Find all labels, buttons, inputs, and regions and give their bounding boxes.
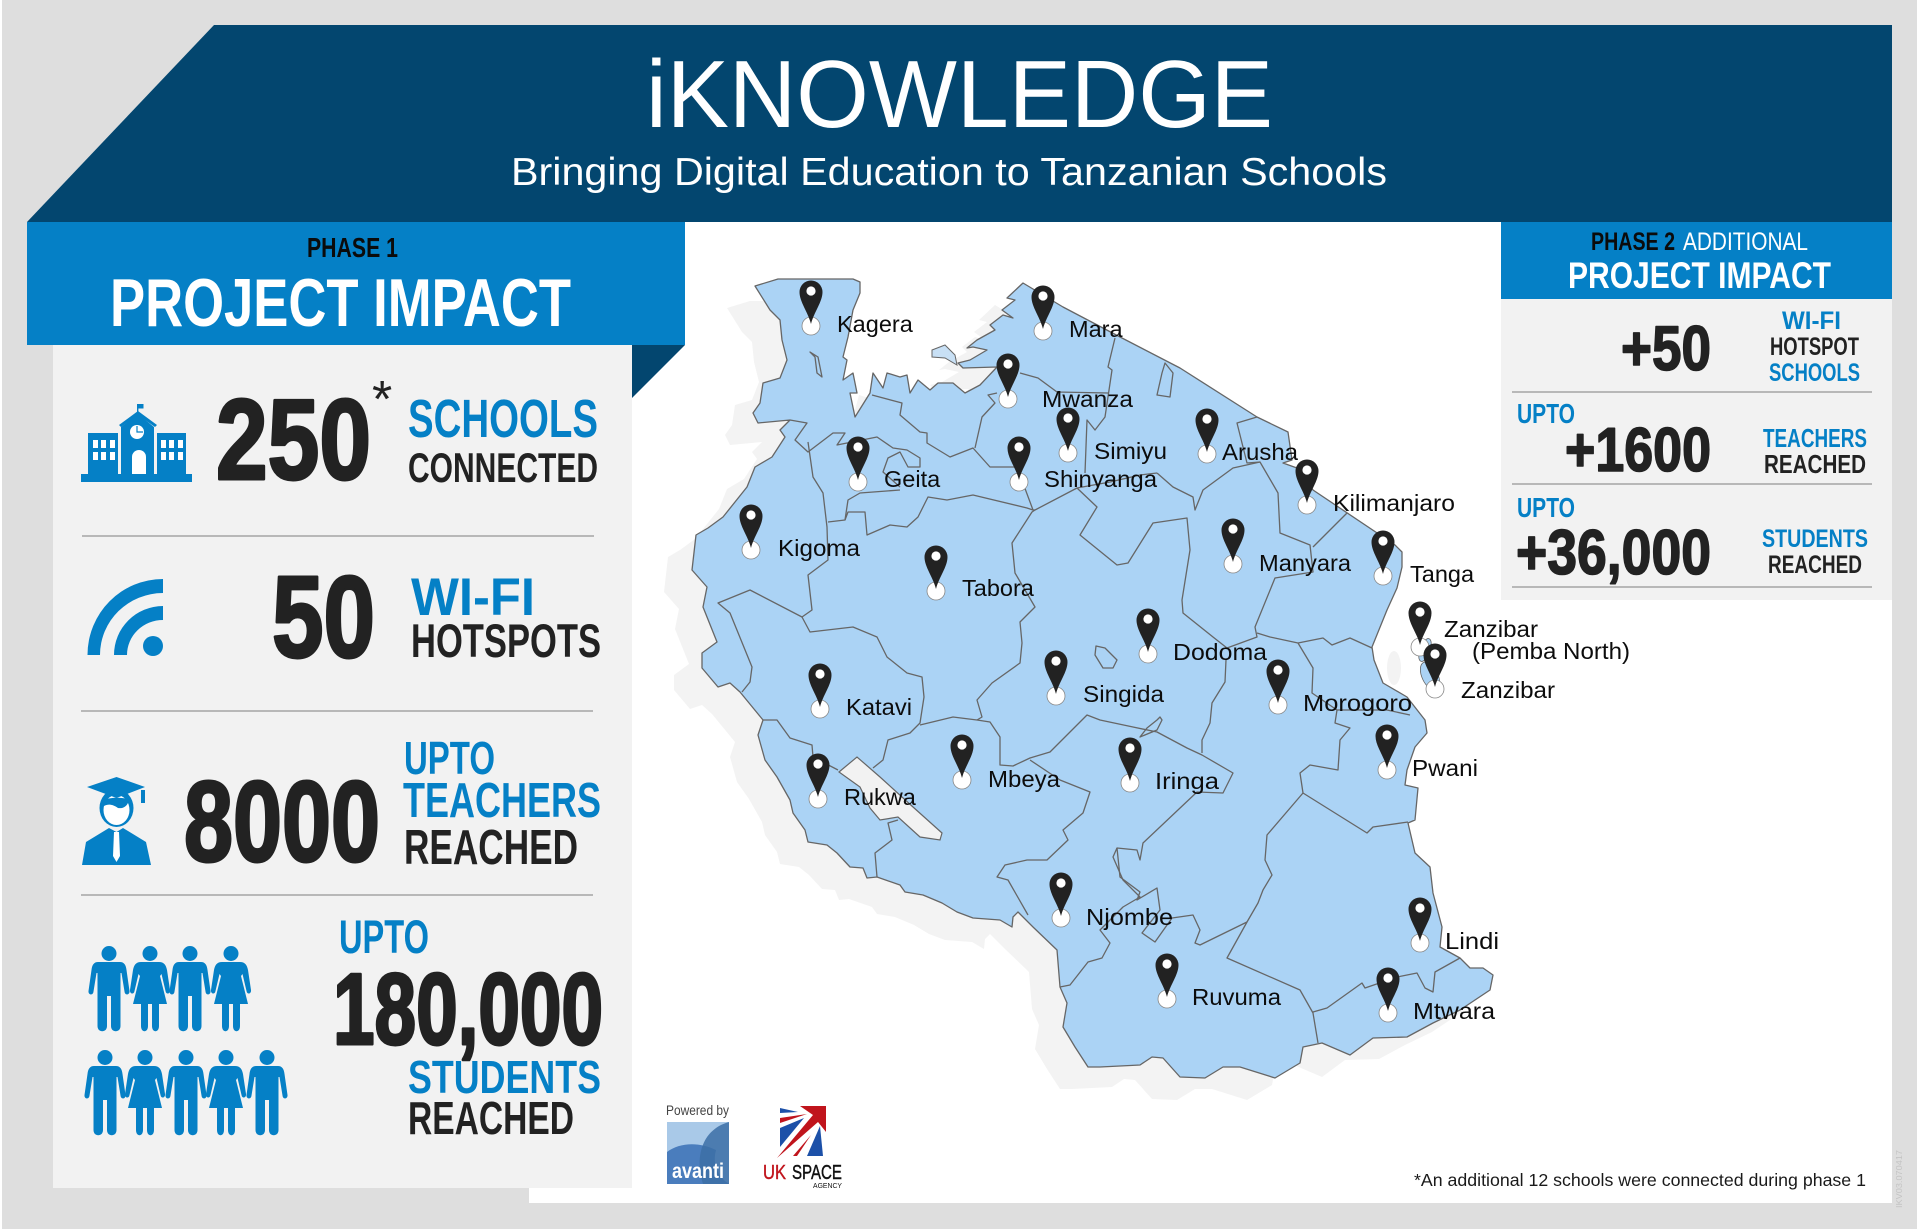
panel background	[53, 345, 632, 1188]
stat: +36,000 students: REACHED	[1768, 551, 1862, 579]
stat: 180,000 students: 180,000	[333, 954, 603, 1066]
stat: +36,000 students: UPTO	[1517, 492, 1575, 523]
region labels: Zanzibar	[1461, 677, 1555, 703]
region labels: Tabora	[962, 575, 1035, 601]
white content area	[529, 222, 1892, 1203]
regions	[692, 279, 1493, 1078]
phase 2 header band	[1501, 222, 1892, 299]
region labels: Kigoma	[778, 535, 861, 561]
region labels: Morogoro	[1303, 690, 1412, 716]
stat: +1600 teachers: UPTO	[1517, 398, 1575, 429]
region labels: Dodoma	[1173, 639, 1268, 665]
phase 2 label: PHASE 2	[1591, 228, 1675, 256]
region labels: Lindi	[1445, 928, 1499, 954]
stat: +50 hotspot schools: HOTSPOT	[1770, 333, 1859, 361]
phase 2 label	[1591, 228, 1808, 256]
subtitle: Bringing Digital Education to Tanzanian Schools	[511, 151, 1387, 194]
stat: 250 schools	[216, 371, 598, 504]
stat: 8000 teachers: REACHED	[404, 821, 578, 875]
header banner	[27, 25, 1892, 222]
region labels: Njombe	[1086, 904, 1173, 930]
stat: 8000 teachers: 8000	[184, 759, 380, 886]
Ukerewe island	[932, 345, 957, 365]
region labels: Pwani	[1412, 755, 1478, 781]
phase 2 label: ADDITIONAL	[1683, 228, 1808, 256]
region labels: Mwanza	[1042, 386, 1134, 412]
stat: +50 hotspot schools: SCHOOLS	[1769, 359, 1860, 387]
region labels: Mara	[1069, 316, 1123, 342]
region labels: Shinyanga	[1044, 466, 1158, 492]
stat: 8000 teachers: TEACHERS	[403, 774, 601, 828]
region labels: Arusha	[1222, 439, 1299, 465]
region labels: Manyara	[1259, 550, 1352, 576]
region labels: Simiyu	[1094, 438, 1167, 464]
stat: +50 hotspot schools: WI-FI	[1782, 307, 1841, 335]
stat: +36,000 students	[1516, 492, 1868, 588]
stat: 50 wi-fi hotspots: 50	[272, 552, 375, 682]
footnote: *An additional 12 schools were connected during phase 1	[1414, 1170, 1866, 1190]
project impact heading: PROJECT IMPACT	[1568, 255, 1831, 296]
region labels: Kilimanjaro	[1333, 490, 1455, 516]
stat: +50 hotspot schools: +50	[1621, 314, 1711, 384]
stat: 8000 teachers	[184, 732, 601, 886]
stat: 8000 teachers: UPTO	[404, 732, 495, 784]
logo: avanti: avanti	[672, 1160, 724, 1183]
stat: 180,000 students: UPTO	[339, 910, 429, 963]
stat: +1600 teachers	[1517, 398, 1867, 485]
icon: wi-fi	[88, 579, 163, 656]
region labels: Katavi	[846, 694, 912, 720]
region boundaries	[718, 338, 1460, 1043]
stat: 180,000 students: STUDENTS	[408, 1051, 601, 1103]
region labels	[778, 311, 1630, 1024]
logo: UK Space Agency: UK	[763, 1162, 787, 1184]
icon: students group	[84, 946, 288, 1135]
stat: 250 schools: 250	[216, 377, 371, 504]
stat: +36,000 students: STUDENTS	[1762, 525, 1868, 553]
region labels: Singida	[1083, 681, 1165, 707]
stat: 180,000 students	[333, 910, 603, 1144]
stat: +36,000 students: +36,000	[1516, 518, 1711, 588]
stat: 50 wi-fi hotspots	[272, 552, 601, 682]
document reference: IKV03.070417	[1894, 1150, 1904, 1208]
stat: 50 wi-fi hotspots: WI-FI	[411, 568, 535, 627]
project impact heading: PROJECT IMPACT	[110, 265, 571, 341]
region labels: Kagera	[837, 311, 914, 337]
logo: UK Space Agency: SPACE	[792, 1162, 842, 1184]
phase 1 header band	[27, 222, 685, 345]
title: iKNOWLEDGE	[646, 41, 1273, 148]
region labels: Rukwa	[844, 784, 917, 810]
region labels: (Pemba North)	[1472, 638, 1630, 664]
logo: UK Space Agency: AGENCY	[813, 1183, 842, 1190]
stat: 50 wi-fi hotspots: HOTSPOTS	[411, 614, 601, 667]
region labels: Mbeya	[988, 766, 1061, 792]
lake Rukwa	[839, 757, 942, 840]
map pins	[740, 280, 1446, 1022]
region labels: Iringa	[1155, 768, 1220, 794]
phase 1 label: PHASE 1	[307, 232, 398, 263]
stat: 180,000 students: REACHED	[408, 1092, 574, 1144]
logo: avanti: Powered by	[666, 1103, 729, 1118]
stat: +50 hotspot schools	[1621, 307, 1860, 387]
stat: +1600 teachers: REACHED	[1764, 449, 1866, 479]
map of Tanzania	[664, 279, 1493, 1100]
region labels: Ruvuma	[1192, 984, 1282, 1010]
panel background	[1501, 299, 1892, 600]
ribbon fold	[632, 345, 685, 398]
icon: school	[81, 404, 192, 482]
stat: +1600 teachers: +1600	[1565, 416, 1711, 485]
stat: +1600 teachers: TEACHERS	[1763, 423, 1867, 453]
icon: graduate	[82, 777, 151, 865]
panel: phase 1 project impact	[27, 222, 685, 1188]
region labels: Tanga	[1410, 561, 1475, 587]
Zanzibar and Pemba islands	[1416, 637, 1444, 693]
map shadow	[664, 301, 1465, 1100]
stat: 250 schools: SCHOOLS	[408, 389, 598, 449]
region labels: Mtwara	[1413, 998, 1496, 1024]
stat: 250 schools: CONNECTED	[408, 444, 598, 491]
coastal shadow patch	[1387, 651, 1401, 685]
region labels: Zanzibar	[1444, 616, 1538, 642]
region labels: Geita	[884, 466, 941, 492]
logo: UK Space Agency	[763, 1106, 842, 1190]
stat: 250 schools: *	[372, 371, 392, 429]
panel: phase 2 additional project impact	[1501, 222, 1892, 600]
logo: avanti	[666, 1103, 729, 1184]
